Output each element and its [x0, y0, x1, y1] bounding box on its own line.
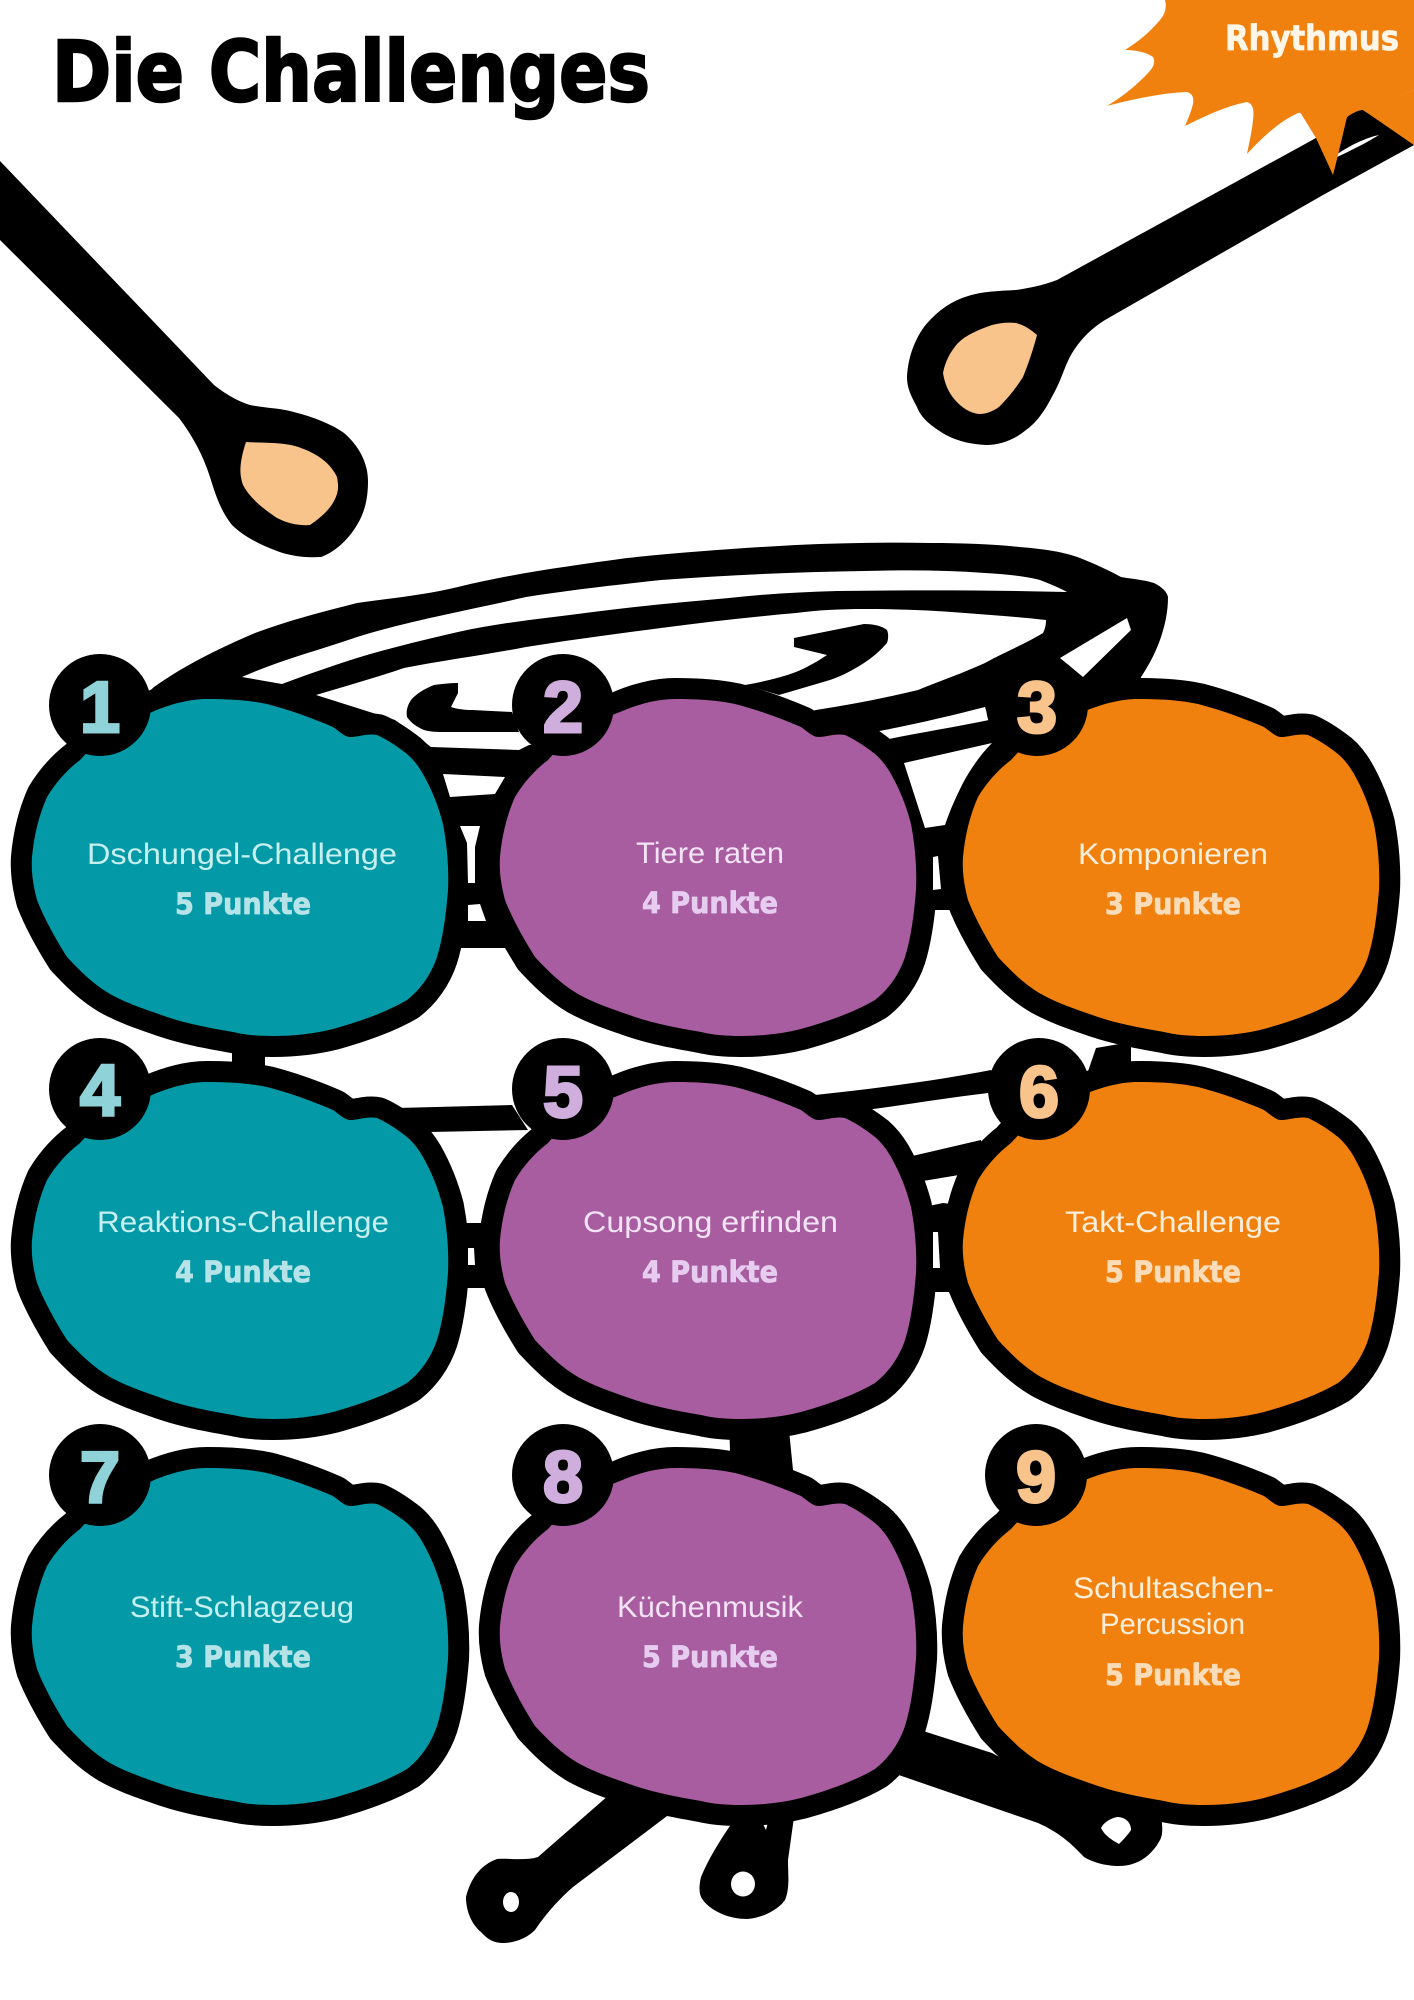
number badge 9: 9 [1016, 1438, 1056, 1518]
points 9: 5 Punkte [1105, 1658, 1241, 1692]
number badge 2 [512, 654, 614, 756]
points 1: 5 Punkte [175, 887, 311, 921]
drum rim silhouette [140, 543, 1168, 948]
number badge 3 [986, 654, 1088, 756]
icon: right drumstick [907, 112, 1414, 445]
label 4: Reaktions-Challenge [97, 1206, 389, 1239]
points 3: 3 Punkte [1105, 887, 1241, 921]
stick tip over star [1336, 110, 1414, 178]
rim interior [316, 609, 1046, 750]
rim highlight upper [242, 570, 1067, 684]
points 8: 5 Punkte [642, 1640, 778, 1674]
number badge 5 [512, 1038, 614, 1140]
drum gaps between panels [443, 743, 992, 1268]
number badge 9 [985, 1424, 1087, 1526]
icon: lower left drumstick [466, 1795, 675, 1943]
icon: lower middle drumstick [700, 1810, 795, 1919]
right hook [745, 624, 888, 695]
icon: left drumstick [0, 161, 368, 557]
label 7: Stift-Schlagzeug [130, 1591, 354, 1624]
label 9: Percussion [1100, 1608, 1245, 1641]
points 5: 4 Punkte [642, 1255, 778, 1289]
label 9: Schultaschen- [1073, 1572, 1274, 1605]
label 5: Cupsong erfinden [583, 1206, 838, 1239]
number badge 4: 4 [80, 1051, 120, 1131]
panel: challenge 9 [963, 1424, 1379, 1805]
number badge 4 [49, 1038, 151, 1140]
number badge 8 [512, 1424, 614, 1526]
panel: challenge 3 [963, 654, 1379, 1036]
title: Die Challenges [52, 23, 650, 121]
number badge 1 [49, 654, 151, 756]
number badge 1: 1 [80, 668, 120, 748]
points 2: 4 Punkte [642, 886, 778, 920]
points 4: 4 Punkte [175, 1255, 311, 1289]
panel: challenge 8 [500, 1424, 916, 1805]
label 2: Tiere raten [636, 837, 784, 870]
icon: lower right drumstick [890, 1730, 1162, 1866]
number badge 6 [988, 1038, 1090, 1140]
panel: challenge 6 [963, 1038, 1379, 1419]
number badge 6: 6 [1019, 1053, 1059, 1133]
number badge 3: 3 [1017, 668, 1057, 748]
number badge 2: 2 [543, 668, 583, 748]
panel: challenge 1 [32, 654, 448, 1036]
drum lower connectors [232, 1040, 1131, 1480]
panel: challenge 2 [500, 654, 916, 1036]
label 3: Komponieren [1078, 838, 1268, 871]
panel: challenge 7 [32, 1424, 448, 1805]
label 8: Küchenmusik [617, 1591, 804, 1624]
panel: challenge 5 [500, 1038, 916, 1419]
left hook [407, 683, 519, 732]
label 1: Dschungel-Challenge [87, 838, 397, 871]
panel: challenge 4 [32, 1038, 448, 1419]
number badge 7: 7 [80, 1438, 120, 1518]
number badge 8: 8 [543, 1438, 583, 1518]
points 7: 3 Punkte [175, 1640, 311, 1674]
label 6: Takt-Challenge [1065, 1206, 1281, 1239]
icon: orange starburst badge [1107, 0, 1414, 178]
number badge 5: 5 [543, 1053, 583, 1133]
points 6: 5 Punkte [1105, 1255, 1241, 1289]
number badge 7 [49, 1424, 151, 1526]
